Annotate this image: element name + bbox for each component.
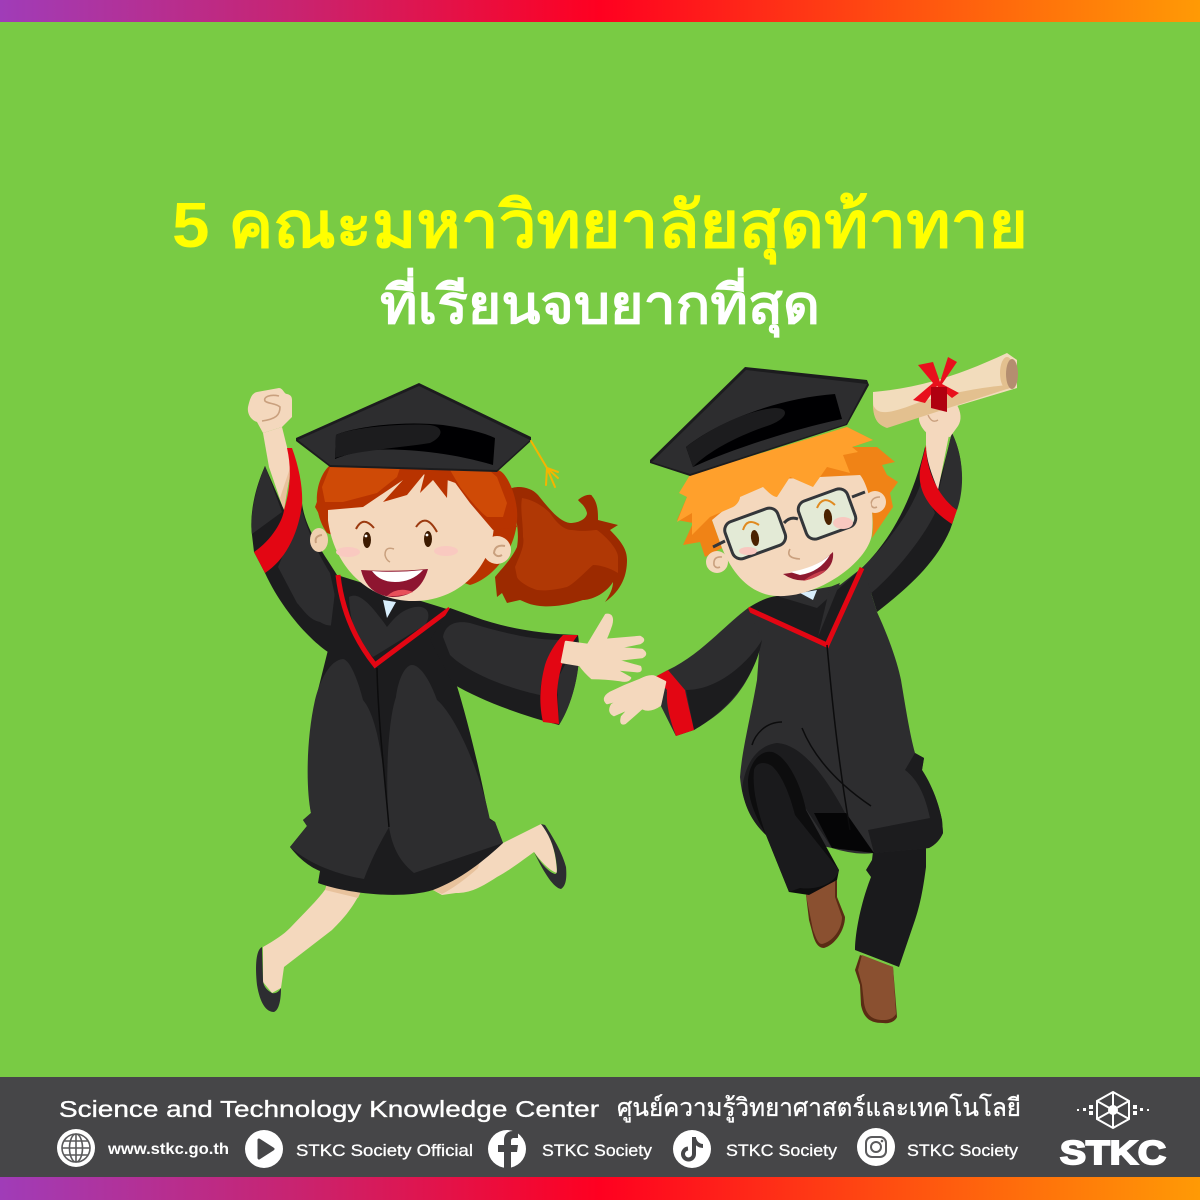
eyebrows — [356, 521, 437, 532]
boy hair front — [677, 427, 873, 535]
boot 1 — [806, 880, 845, 948]
boy cap — [650, 367, 869, 476]
girl raised arm — [248, 388, 292, 510]
bottom gradient bar — [0, 1177, 1200, 1200]
back pants leg — [855, 833, 926, 967]
red cuff — [655, 670, 694, 736]
girl hair behind face — [317, 465, 517, 585]
footer heading — [59, 1093, 1021, 1123]
shirt collar — [383, 600, 396, 618]
boy lower legs and boots — [806, 833, 926, 1023]
boy hand — [605, 676, 665, 723]
smile — [783, 552, 833, 580]
organisation name English: Science and Technology Knowledge Center — [59, 1096, 599, 1122]
website link — [57, 1129, 229, 1167]
nose — [789, 549, 800, 559]
logo wordmark: STKC — [1060, 1134, 1166, 1171]
diploma scroll — [873, 353, 1018, 428]
girl cap — [296, 383, 558, 487]
icon: globe — [57, 1129, 95, 1167]
girl gown — [251, 448, 579, 895]
facebook link: STKC Society — [542, 1141, 653, 1160]
boot 2 — [855, 955, 897, 1023]
girl shoes — [256, 824, 566, 1012]
boy glasses — [713, 486, 865, 561]
youtube link: STKC Society Official — [296, 1141, 473, 1160]
red collar — [338, 575, 450, 665]
gown right panel — [387, 665, 503, 873]
icon: play — [245, 1130, 283, 1168]
STKC logo — [1060, 1092, 1166, 1171]
boy raised arm — [863, 405, 962, 612]
tiktok link: STKC Society — [726, 1141, 838, 1160]
organisation name Thai: ศูนย์ความรู้วิทยาศาสตร์และเทคโนโลยี — [617, 1093, 1021, 1123]
gown left panel — [290, 659, 389, 879]
tiktok link — [673, 1130, 838, 1168]
gown body — [290, 575, 503, 895]
title line 2: ที่เรียนจบยากที่สุด — [380, 267, 820, 338]
red cuff right — [540, 635, 578, 724]
illustration: graduate girl — [248, 383, 645, 1012]
gown chest — [349, 596, 428, 657]
eyes — [363, 532, 371, 548]
instagram link: STKC Society — [907, 1141, 1019, 1160]
boy gown body — [740, 567, 943, 895]
top gradient bar — [0, 0, 1200, 22]
gown hem — [868, 753, 943, 853]
girl legs — [263, 824, 557, 993]
girl ponytail — [495, 487, 627, 606]
icon: instagram — [857, 1128, 895, 1166]
boy left sleeve — [655, 608, 762, 736]
red cuff left — [254, 448, 302, 573]
eyes — [750, 530, 760, 546]
title line 1: 5 คณะมหาวิทยาลัยสุดท้าทาย — [172, 189, 1028, 265]
blush — [336, 547, 360, 557]
girl hand — [562, 615, 645, 681]
raised sleeve — [251, 466, 385, 652]
ribbon — [913, 357, 959, 403]
logo atom mark — [1077, 1092, 1149, 1128]
front pants leg — [748, 752, 839, 895]
girl fringe — [315, 467, 517, 530]
shirt collar — [800, 590, 817, 600]
icon: tiktok — [673, 1130, 711, 1168]
title — [172, 189, 1028, 338]
right sleeve — [430, 608, 579, 725]
website link: www.stkc.go.th — [107, 1141, 229, 1158]
tassel — [531, 441, 558, 487]
blush — [739, 547, 757, 555]
girl fist — [248, 388, 292, 433]
boy face — [712, 475, 873, 596]
illustration: graduate boy — [605, 353, 1018, 1023]
facebook link — [488, 1130, 653, 1168]
mouth — [361, 569, 428, 597]
footer panel — [0, 1077, 1200, 1177]
red collar — [748, 568, 862, 645]
boy hair back — [677, 427, 898, 557]
red cuff — [920, 445, 957, 524]
boy ears — [706, 491, 886, 573]
girl face — [327, 471, 494, 601]
girl ears — [310, 528, 511, 564]
boy raised hand — [919, 405, 961, 437]
eyebrows — [743, 500, 835, 530]
youtube link — [245, 1130, 473, 1168]
knee fold — [742, 743, 874, 853]
yoke — [748, 567, 863, 645]
instagram link — [857, 1128, 1019, 1166]
icon: facebook — [488, 1130, 526, 1168]
nose — [385, 548, 394, 562]
